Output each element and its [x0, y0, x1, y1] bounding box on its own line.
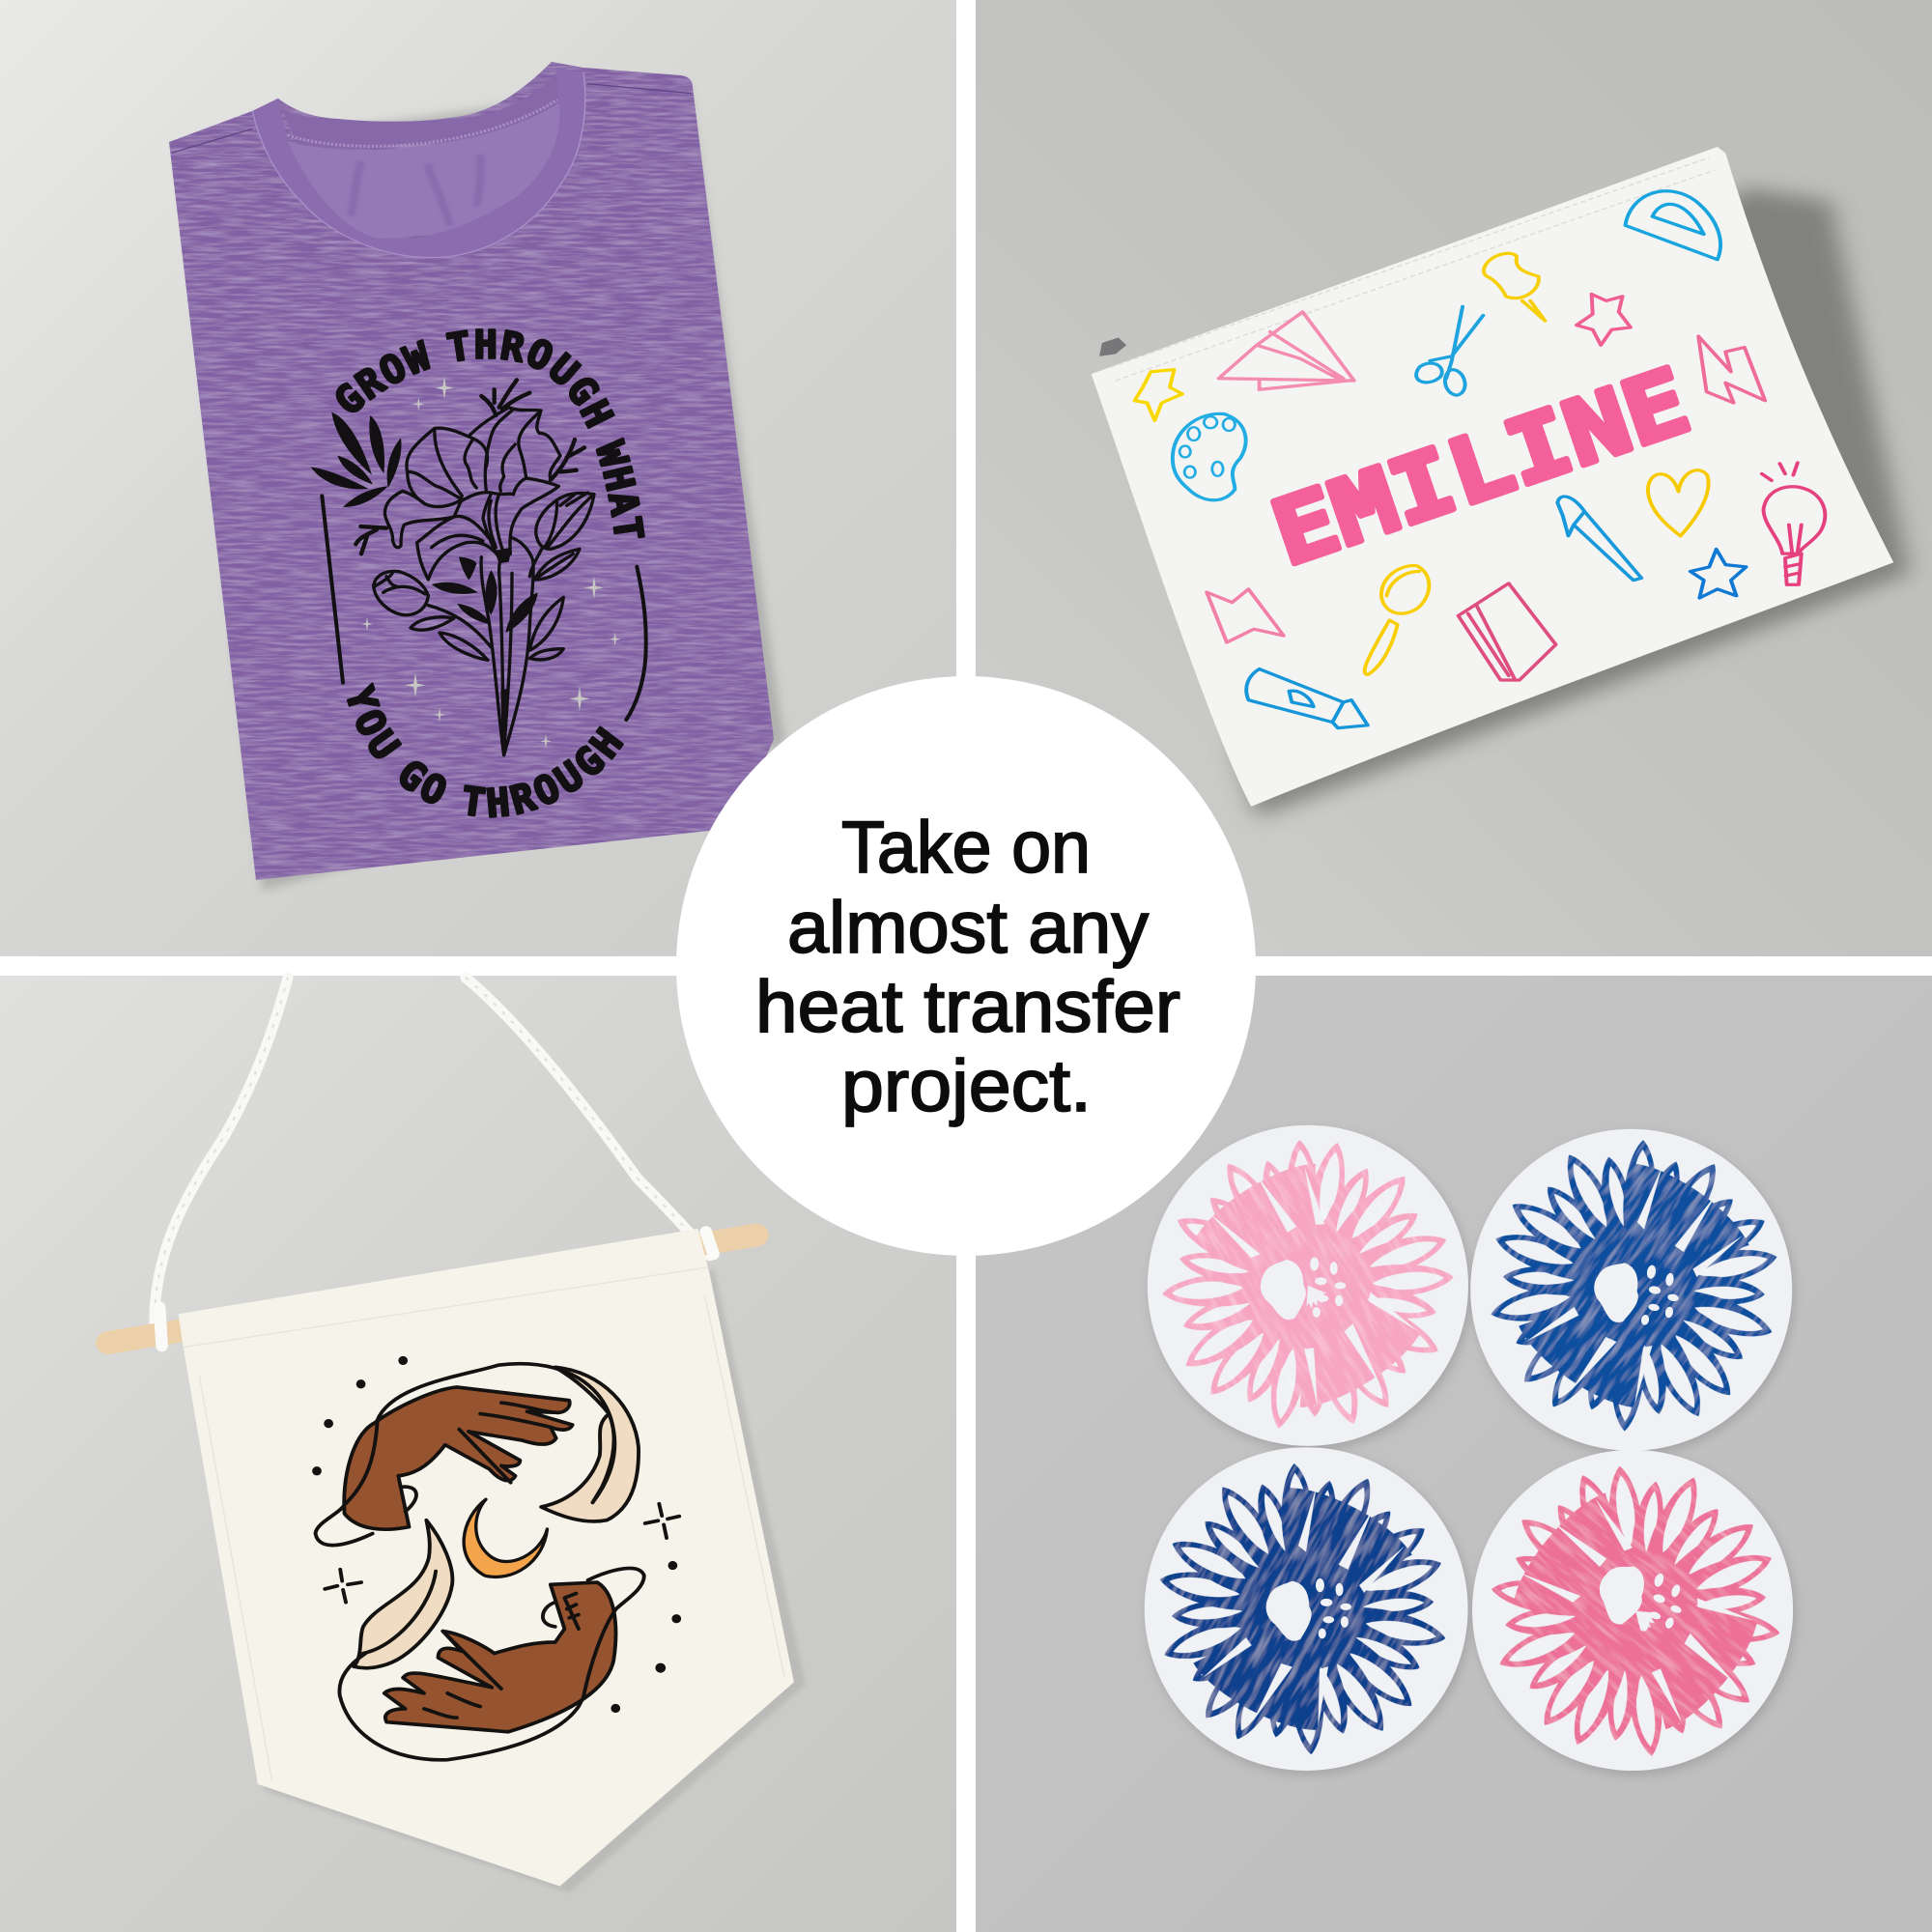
banner [108, 1229, 806, 1892]
black inner leaves [432, 548, 538, 756]
bloom left [407, 428, 488, 506]
crayon [1246, 669, 1368, 728]
coaster pink top left [1107, 1085, 1509, 1487]
bud right [536, 493, 594, 549]
coaster navy bottom left [1106, 1412, 1499, 1805]
pen [1557, 497, 1641, 581]
bud left [374, 571, 428, 615]
inner strokes on cream [363, 1414, 614, 1653]
lightning bolt upper [1698, 336, 1765, 403]
black leaves left [311, 412, 401, 507]
photo background bottom left [0, 976, 956, 1932]
coaster blue top right [1431, 1083, 1836, 1489]
photo background bottom right [976, 976, 1932, 1932]
shirt slogan bottom: YOU GO THROUGH [346, 682, 624, 818]
floral graphic [311, 377, 646, 756]
shirt slogan top: GROW THROUGH WHAT [336, 328, 645, 539]
lower hand [384, 1582, 615, 1732]
blue star [1690, 550, 1747, 598]
inner neck [288, 103, 560, 239]
push pin [1484, 253, 1545, 321]
headline: heat transfer [755, 966, 1180, 1048]
finger lines [424, 1403, 579, 1718]
protractor [1625, 191, 1720, 260]
panel: canvas banner photo [0, 976, 956, 1932]
photo background top left [0, 0, 956, 956]
central petals [384, 478, 558, 580]
panel: white pouch photo [976, 0, 1932, 956]
shirt shadow [179, 81, 784, 891]
outline blob lower [339, 1568, 644, 1760]
hem line [183, 1267, 784, 1779]
photo background top right [976, 0, 1932, 956]
pouch [1092, 147, 1910, 817]
cream shapes [354, 1367, 639, 1668]
palette [1173, 413, 1246, 500]
coaster shadows [1147, 1129, 1796, 1775]
shirt body [169, 62, 774, 880]
sprigs [355, 380, 584, 554]
dots [312, 1356, 681, 1713]
stems [428, 538, 543, 755]
heart [1648, 470, 1709, 536]
outline leaves [411, 549, 580, 660]
magnifier [1365, 565, 1429, 674]
rope loops [159, 1232, 714, 1346]
silver sparkles [361, 377, 621, 749]
seam stitching [288, 99, 557, 146]
collar ring [252, 68, 585, 258]
headline [755, 807, 1180, 1127]
shoulder seams [171, 84, 692, 153]
banner fabric [179, 1229, 794, 1887]
upper hand [344, 1387, 573, 1529]
outline blob upper [316, 1364, 614, 1546]
book [1459, 583, 1556, 680]
lightning bolt lower [1207, 589, 1284, 642]
coaster rose bottom right [1431, 1406, 1841, 1816]
pink star top [1577, 294, 1631, 345]
headline: Take on [841, 807, 1091, 889]
palette wells [1179, 416, 1235, 478]
back neck band [282, 72, 559, 155]
moon [464, 1499, 547, 1577]
scissors [1416, 306, 1483, 395]
yellow star [1135, 370, 1182, 420]
center circle callout [676, 676, 1256, 1256]
hanging rope [155, 978, 710, 1328]
pouch shadow [1235, 187, 1910, 817]
headline: almost any [787, 887, 1149, 969]
paper plane [1219, 312, 1354, 389]
zipper stitch [1110, 157, 1715, 381]
collar [171, 68, 692, 258]
pouch name text: EMILINE [1260, 349, 1701, 586]
sparkles [325, 1504, 679, 1603]
inner neck folds [351, 155, 481, 225]
banner shadow [190, 1269, 806, 1892]
badge side lines [322, 496, 646, 720]
dowel [108, 1235, 756, 1343]
panel: purple t-shirt photo [0, 0, 956, 956]
zipper pull [1099, 337, 1126, 356]
pouch body [1092, 147, 1893, 807]
headline: project. [841, 1045, 1092, 1127]
panel: coasters photo [976, 976, 1932, 1932]
light bulb [1762, 463, 1825, 584]
collar edge line [252, 72, 585, 258]
bloom top [469, 408, 560, 491]
